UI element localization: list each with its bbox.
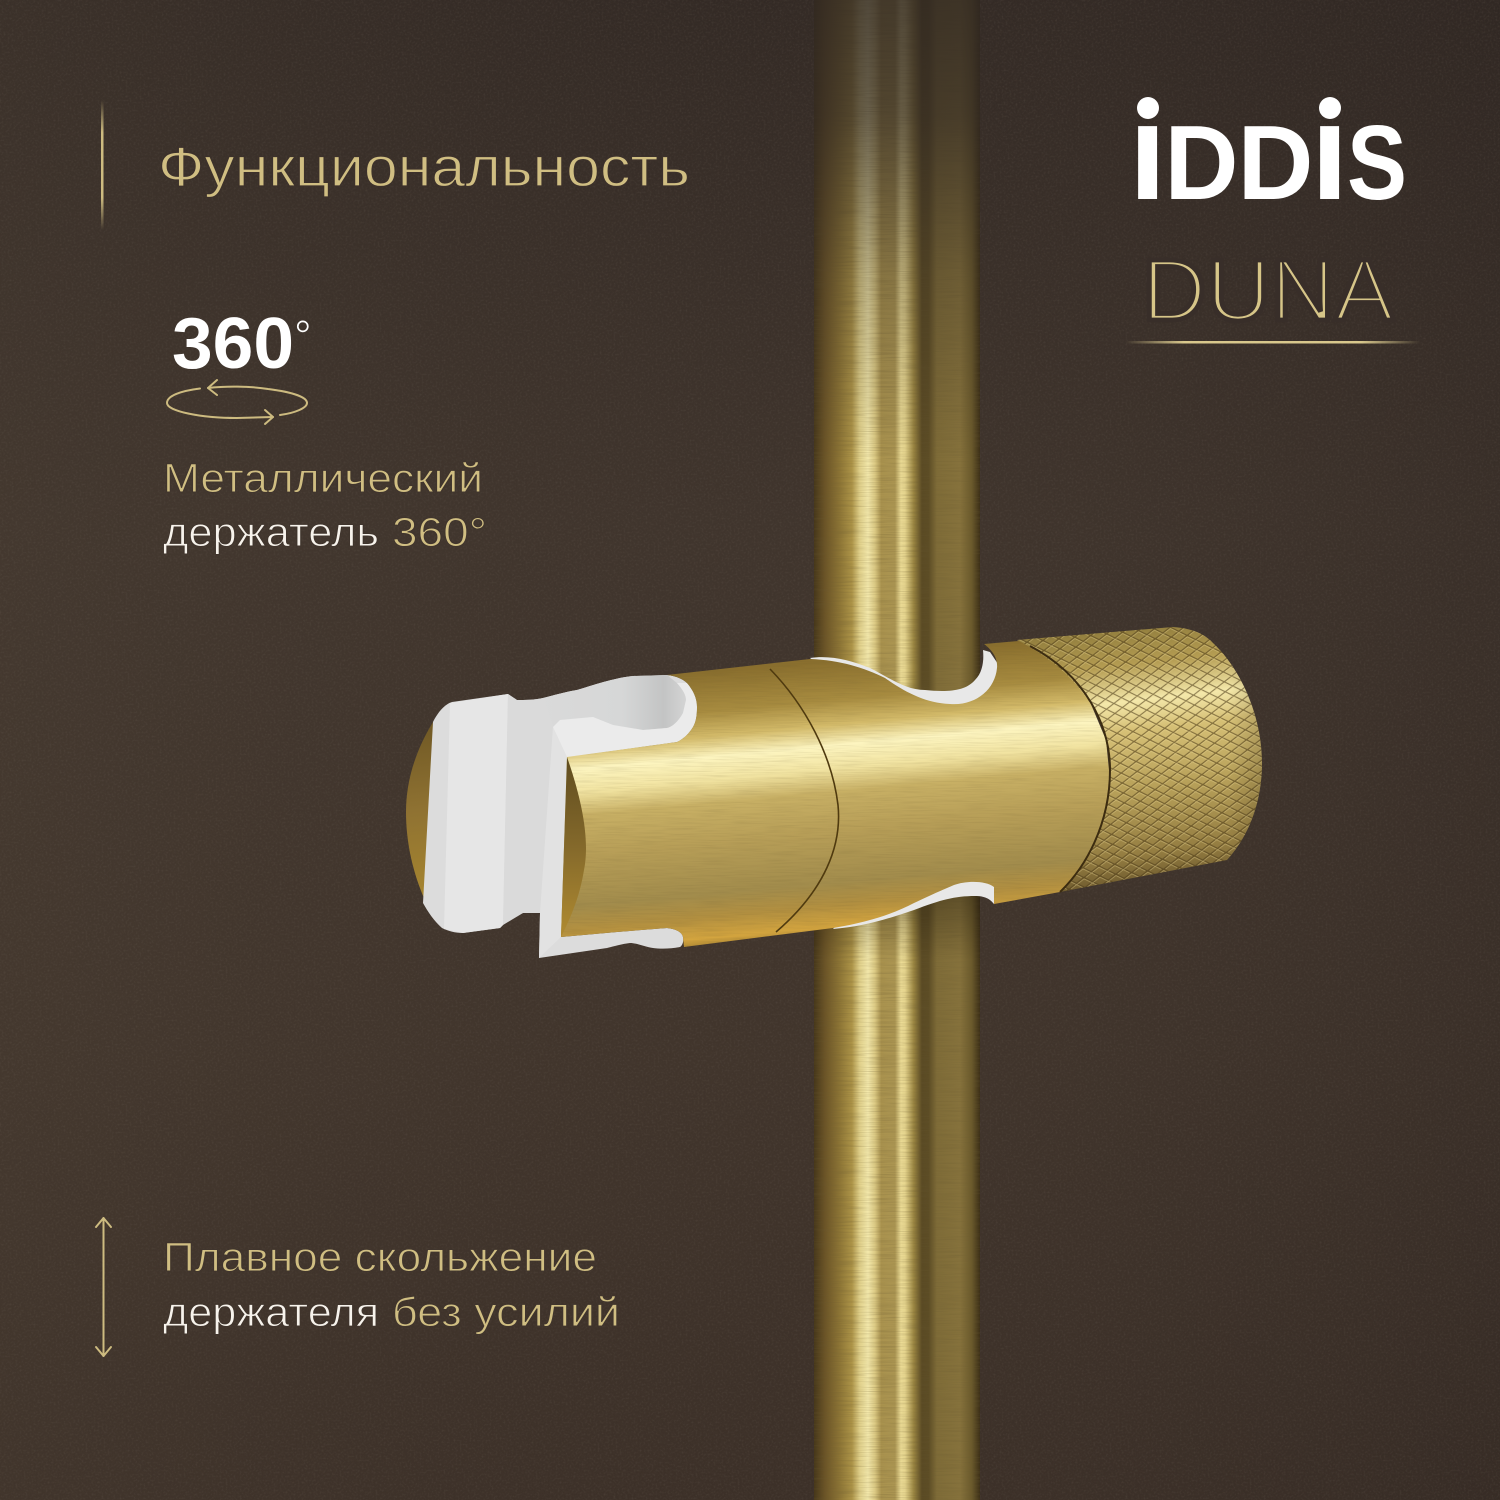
series underline [1125, 341, 1420, 344]
brand logo: IDDIS: i [1310, 75, 1349, 229]
icon: rotation arrows [167, 380, 307, 424]
text: smooth sliding: держателя [163, 1289, 379, 1335]
text: smooth sliding: Плавное скольжение [163, 1234, 597, 1280]
brand logo: IDDIS: i [1128, 75, 1167, 229]
brand logo: IDDIS [1137, 97, 1404, 200]
text: metal holder 360 [163, 455, 487, 555]
text: metal holder 360: Металлический [163, 455, 483, 501]
shower holder on rail [406, 627, 1262, 958]
series name: DUNA: DUNA [1142, 242, 1394, 339]
clip wedge [539, 727, 567, 958]
white band behind top notch [810, 650, 1002, 720]
brushed gold body [561, 640, 1111, 947]
text: smooth sliding [163, 1234, 620, 1335]
white plastic clip [423, 675, 697, 958]
text: metal holder 360: держатель [163, 509, 379, 555]
360 degree number: 360 [172, 304, 294, 384]
body mouth shadow [561, 757, 586, 937]
text: smooth sliding: без усилий [392, 1289, 620, 1335]
body seam [770, 669, 839, 932]
text: metal holder 360: 360° [392, 509, 487, 555]
white band behind bottom notch [833, 870, 996, 929]
brass shower rail rod [814, 0, 980, 1500]
holder end cap [406, 722, 442, 898]
clip hollow channel [543, 675, 686, 730]
360 degree number: ° [294, 312, 312, 361]
brand logo: IDDIS: D [1164, 104, 1238, 222]
title: Функциональность [158, 135, 690, 198]
brand logo: IDDIS: D [1238, 104, 1314, 222]
brand logo: IDDIS: S [1347, 104, 1407, 222]
icon: vertical double arrow [96, 1218, 111, 1356]
vertical gold accent line [101, 100, 104, 230]
knurled grip [1017, 627, 1262, 892]
